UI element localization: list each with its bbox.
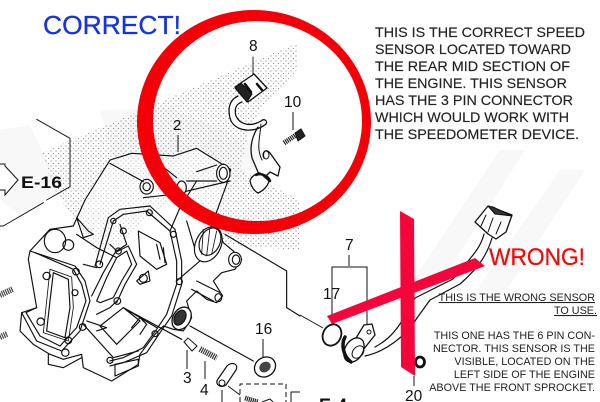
speed sensor 8 xyxy=(229,38,280,193)
description: correct sensor: THE ENGINE. THIS SENSOR xyxy=(375,76,567,91)
engine crankcase drawing xyxy=(0,119,300,381)
description: correct sensor xyxy=(375,25,585,142)
description: correct sensor: WHICH WOULD WORK WITH xyxy=(375,110,569,125)
red circle highlight xyxy=(137,10,371,234)
description: wrong sensor: TO USE. xyxy=(554,305,597,317)
part label 10 with bolt: 10 xyxy=(284,94,302,111)
part label 2 xyxy=(173,117,181,152)
stopper plate and bolt xyxy=(217,363,300,402)
bolts at left edge xyxy=(0,289,13,337)
part label 16 with seal: 16 xyxy=(255,321,272,338)
part label 10 with bolt xyxy=(284,94,305,143)
part label 3 with dowel: 3 xyxy=(183,370,192,387)
arrow: E-16 reference xyxy=(0,164,62,195)
description: wrong sensor: NECTOR. THIS SENSOR IS THE xyxy=(433,343,595,355)
description: wrong sensor: ABOVE THE FRONT SPROCKET. xyxy=(429,382,595,394)
description: correct sensor: HAS THE 3 PIN CONNECTOR xyxy=(375,93,573,108)
description: wrong sensor: THIS IS THE WRONG SENSOR xyxy=(439,292,595,304)
description: wrong sensor: THIS ONE HAS THE 6 PIN CON- xyxy=(434,330,595,342)
part label 4 with spring: 4 xyxy=(200,382,209,399)
description: correct sensor: THE SPEEDOMETER DEVICE. xyxy=(375,127,579,142)
part label 20 with washer xyxy=(405,357,424,402)
description: wrong sensor: VISIBLE, LOCATED ON THE xyxy=(454,356,595,368)
speed sensor 8: 8 xyxy=(249,38,258,55)
heading: correct: CORRECT! xyxy=(43,12,181,40)
part labels 7 and 17 with bracket: 7 xyxy=(345,237,354,254)
heading: wrong: WRONG! xyxy=(489,244,585,271)
part labels 7 and 17 with bracket xyxy=(300,237,367,349)
wrong sensor with 6 pin connector xyxy=(340,206,512,366)
part label 16 with seal xyxy=(251,321,279,381)
description: wrong sensor xyxy=(429,292,597,394)
part labels 7 and 17 with bracket: 17 xyxy=(323,286,340,303)
description: correct sensor: SENSOR LOCATED TOWARD xyxy=(375,42,571,57)
description: correct sensor: THE REAR MID SECTION OF xyxy=(375,59,570,74)
red cross over wrong sensor xyxy=(327,211,485,376)
part label 3 with dowel xyxy=(183,338,197,387)
arrow: E-16 reference: E-16 xyxy=(21,174,62,192)
description: wrong sensor: LEFT SIDE OF THE ENGINE xyxy=(454,369,595,381)
part label 4 with spring xyxy=(200,349,217,399)
description: correct sensor: THIS IS THE CORRECT SPEED xyxy=(375,25,585,40)
part label 2: 2 xyxy=(173,117,181,134)
